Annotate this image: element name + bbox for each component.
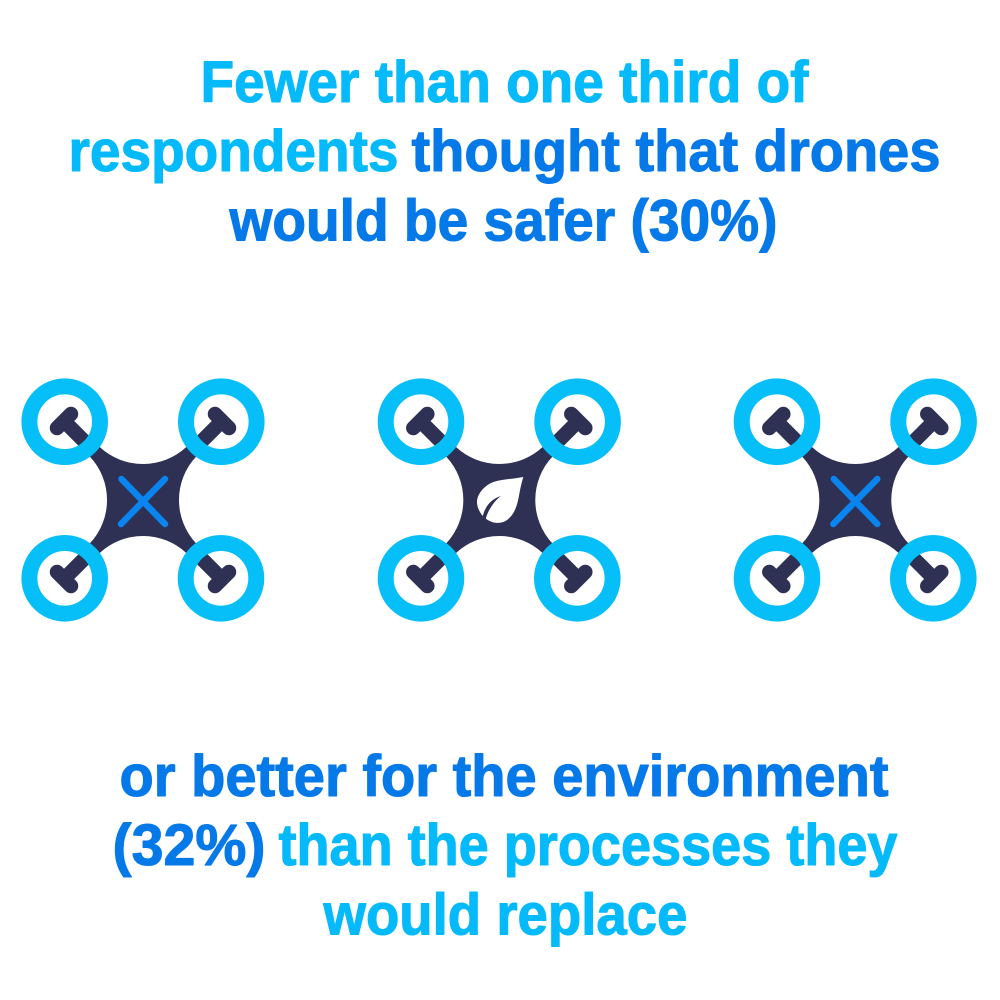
heading: bottom statement: than the processes they xyxy=(278,813,898,878)
heading: top statement: respondents xyxy=(68,119,398,184)
heading: bottom statement xyxy=(112,744,898,948)
heading: bottom statement: (32%) xyxy=(112,813,266,878)
icon: drone with X (left) xyxy=(29,386,257,614)
heading: top statement: would be safer (30%) xyxy=(229,188,778,254)
heading: bottom statement: would replace xyxy=(323,882,688,948)
heading: bottom statement: or better for the environment xyxy=(120,744,888,809)
icon: drone with X (right) xyxy=(742,386,969,614)
heading: top statement xyxy=(68,50,940,254)
heading: top statement: Fewer than one third of xyxy=(200,50,809,115)
icon: drone with leaf (centre) xyxy=(386,386,613,614)
heading: top statement: thought that drones xyxy=(412,119,940,184)
